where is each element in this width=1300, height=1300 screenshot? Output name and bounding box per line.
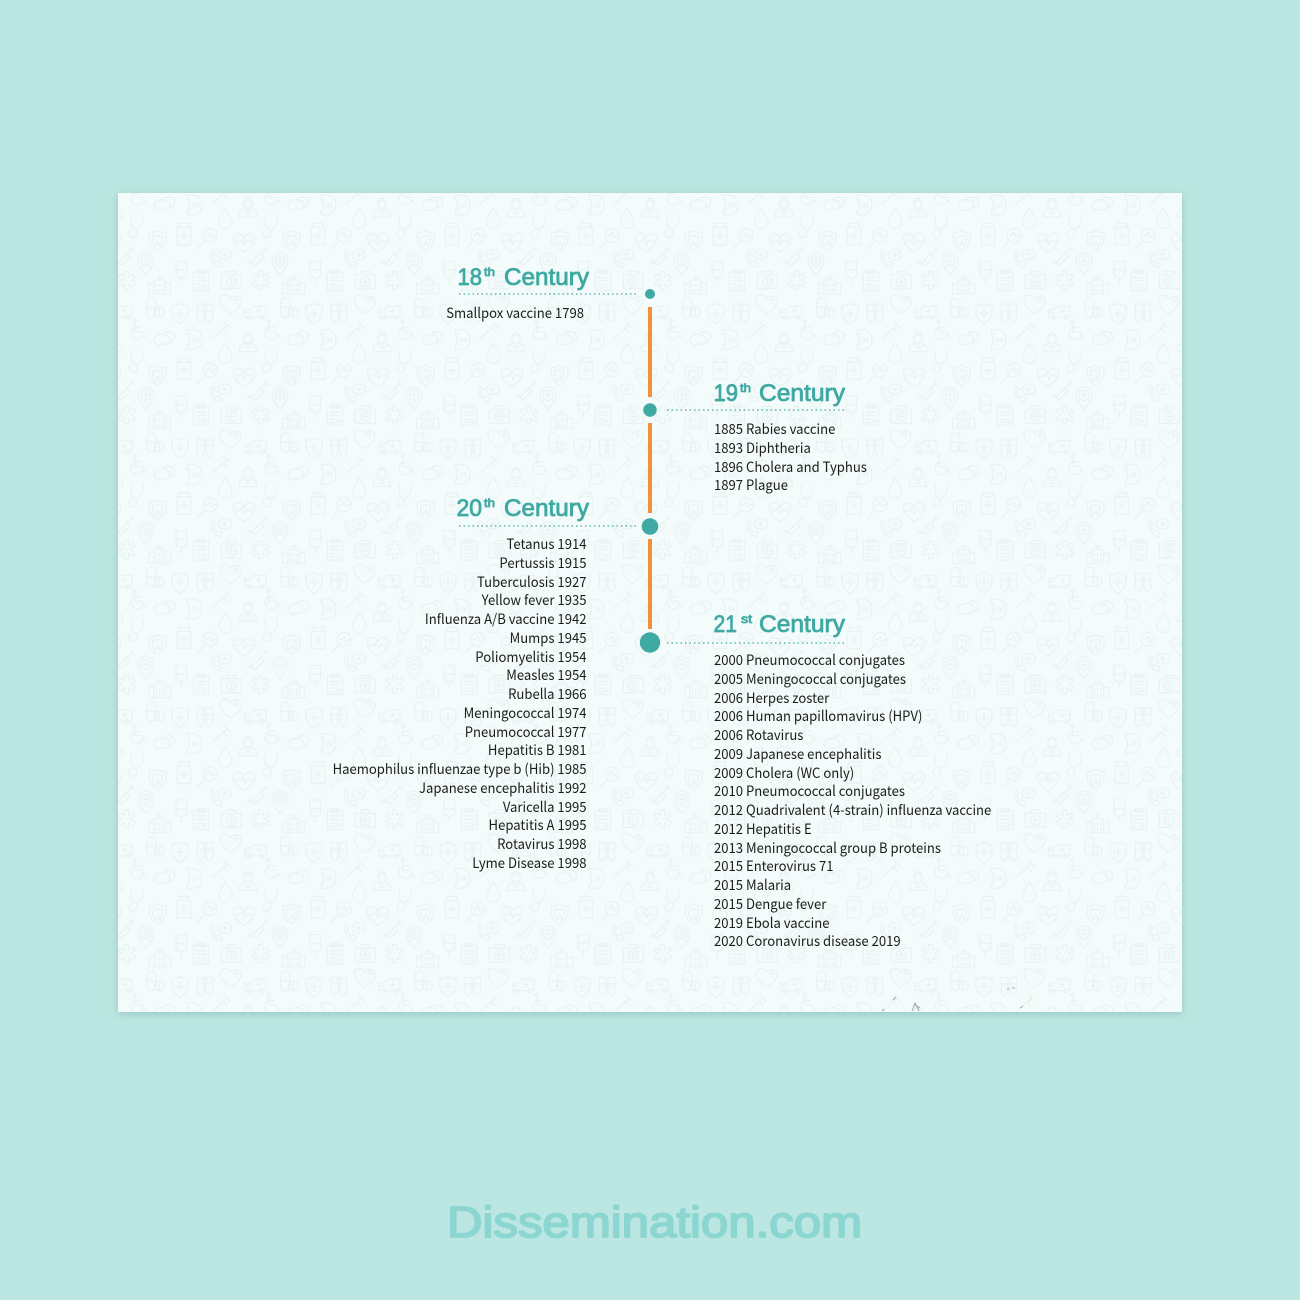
text: 19th century list: 1897 Plague xyxy=(714,475,788,495)
heading: 18th century: 18 xyxy=(458,264,482,291)
text: 21st century list: 2012 Quadrivalent (4-strain) influenza vaccine xyxy=(714,800,991,820)
text: 18th century list: Smallpox vaccine 1798 xyxy=(446,303,584,323)
heading: 21st century: Century xyxy=(759,611,845,638)
text: 21st century list: 2005 Meningococcal conjugates xyxy=(714,669,906,689)
heading: 20th century: 20 xyxy=(456,495,482,522)
text: 20th century list: Japanese encephalitis 1992 xyxy=(419,778,586,798)
text: 20th century list: Rotavirus 1998 xyxy=(497,834,586,854)
heading: 20th century: th xyxy=(484,496,495,510)
text: 21st century list: 2006 Rotavirus xyxy=(714,725,803,745)
text: 20th century list: Pneumococcal 1977 xyxy=(465,722,586,742)
text: 20th century list: Tetanus 1914 xyxy=(506,534,586,554)
text: 20th century list: Lyme Disease 1998 xyxy=(472,853,586,873)
heading: 19th century: Century xyxy=(759,380,845,407)
heading: 18th century: Century xyxy=(504,264,589,291)
text: 19th century list: 1885 Rabies vaccine xyxy=(714,419,835,439)
text: 21st century list: 2015 Dengue fever xyxy=(714,894,826,914)
text: 21st century list: 2012 Hepatitis E xyxy=(714,819,812,839)
text: 21st century list: 2009 Japanese encephalitis xyxy=(714,744,881,764)
text: 20th century list: Hepatitis A 1995 xyxy=(489,815,586,835)
heading: 18th century: th xyxy=(484,265,495,279)
text: 20th century list: Varicella 1995 xyxy=(503,797,586,817)
heading: 21st century: 21 xyxy=(714,611,737,638)
text: 20th century list xyxy=(333,534,586,873)
heading: 21st century: st xyxy=(741,612,753,626)
dotted leader lines xyxy=(459,294,847,643)
text: 20th century list: Pertussis 1915 xyxy=(499,553,586,573)
heading: 19th century: th xyxy=(740,381,751,395)
text: 21st century list: 2020 Coronavirus disease 2019 xyxy=(714,931,901,951)
text: 20th century list: Hepatitis B 1981 xyxy=(488,740,586,760)
text: 20th century list: Influenza A/B vaccine 1942 xyxy=(425,609,586,629)
heading: 20th century: Century xyxy=(504,495,589,522)
text: 20th century list: Poliomyelitis 1954 xyxy=(475,647,586,667)
text: 21st century list: 2013 Meningococcal group B proteins xyxy=(714,838,941,858)
text: 21st century list: 2009 Cholera (WC only) xyxy=(714,763,854,783)
text: 21st century list: 2006 Human papillomavirus (HPV) xyxy=(714,706,922,726)
text: 20th century list: Mumps 1945 xyxy=(510,628,586,648)
footer wordmark: Dissemination.com xyxy=(447,1198,862,1247)
text: 20th century list: Haemophilus influenzae type b (Hib) 1985 xyxy=(333,759,586,779)
text: 21st century list: 2000 Pneumococcal conjugates xyxy=(714,650,905,670)
text: 21st century list: 2006 Herpes zoster xyxy=(714,688,829,708)
timeline nodes xyxy=(640,289,660,653)
text: 20th century list: Tuberculosis 1927 xyxy=(477,572,586,592)
text: 21st century list: 2015 Enterovirus 71 xyxy=(714,856,834,876)
text: 20th century list: Rubella 1966 xyxy=(508,684,586,704)
text: 20th century list: Meningococcal 1974 xyxy=(464,703,586,723)
text: 21st century list: 2010 Pneumococcal conjugates xyxy=(714,781,905,801)
text: 21st century list xyxy=(714,650,991,951)
heading: 19th century: 19 xyxy=(714,380,738,407)
orange connector lines xyxy=(648,307,652,629)
text: 21st century list: 2019 Ebola vaccine xyxy=(714,913,830,933)
text: 20th century list: Measles 1954 xyxy=(506,665,586,685)
text: 19th century list: 1896 Cholera and Typhus xyxy=(714,457,867,477)
text: 20th century list: Yellow fever 1935 xyxy=(482,590,586,610)
text: 19th century list xyxy=(714,419,867,495)
text: 19th century list: 1893 Diphtheria xyxy=(714,438,811,458)
text: 21st century list: 2015 Malaria xyxy=(714,875,791,895)
